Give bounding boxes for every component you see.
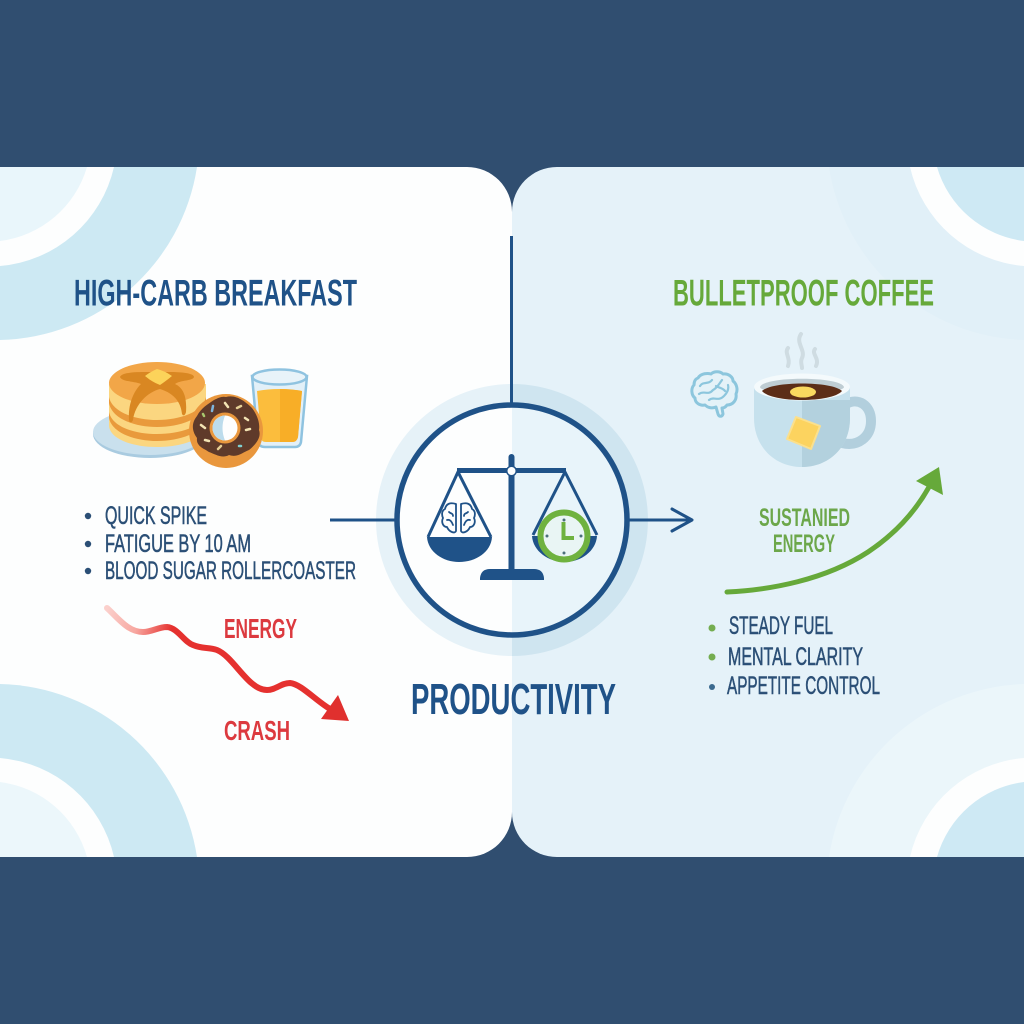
list: coffee benefits: APPETITE CONTROL [727, 672, 880, 700]
label: productivity: PRODUCTIVITY [411, 675, 616, 724]
icon: mug handle [842, 401, 871, 444]
heading: high-carb breakfast: HIGH-CARB BREAKFAST [74, 272, 357, 314]
chart: energy crash arrow [107, 608, 349, 721]
list: breakfast effects: BLOOD SUGAR ROLLERCOASTER [105, 557, 356, 585]
icon: chocolate donut [189, 394, 263, 468]
label: sustained energy [759, 504, 850, 558]
icon: plate [93, 409, 207, 458]
icon: pancake stack [109, 362, 206, 447]
connector: vertical line [510, 236, 513, 404]
chart: sustained energy arrow [727, 467, 943, 592]
list: coffee benefits [708, 612, 880, 700]
list: breakfast effects: QUICK SPIKE [105, 502, 207, 530]
icon: brain, right panel [692, 372, 737, 416]
list: breakfast effects: FATIGUE BY 10 AM [105, 530, 251, 558]
panel: bulletproof coffee [512, 167, 1024, 857]
label: energy: ENERGY [224, 613, 297, 644]
label: sustained energy: ENERGY [773, 530, 835, 558]
icon: pancakes, donut and juice [93, 362, 307, 468]
label: crash: CRASH [224, 715, 290, 746]
icon: coffee with butter [754, 334, 871, 467]
icon: steam [787, 334, 817, 368]
emblem ring [397, 405, 627, 635]
panel: high-carb breakfast [0, 167, 512, 857]
scale stand [457, 454, 566, 580]
emblem halo [376, 384, 648, 656]
label: sustained energy: SUSTANIED [759, 504, 850, 532]
right pan with clock [532, 472, 597, 562]
connector: left line [330, 518, 397, 522]
icon: mug body [754, 374, 850, 467]
list: coffee benefits: STEADY FUEL [729, 612, 833, 640]
list: coffee benefits: MENTAL CLARITY [728, 643, 863, 671]
icon: orange juice glass [252, 370, 307, 447]
left pan with brain [427, 472, 492, 562]
list: breakfast effects [85, 502, 356, 585]
icon: balance scale emblem [376, 384, 648, 656]
arrow: right connector [628, 509, 692, 531]
